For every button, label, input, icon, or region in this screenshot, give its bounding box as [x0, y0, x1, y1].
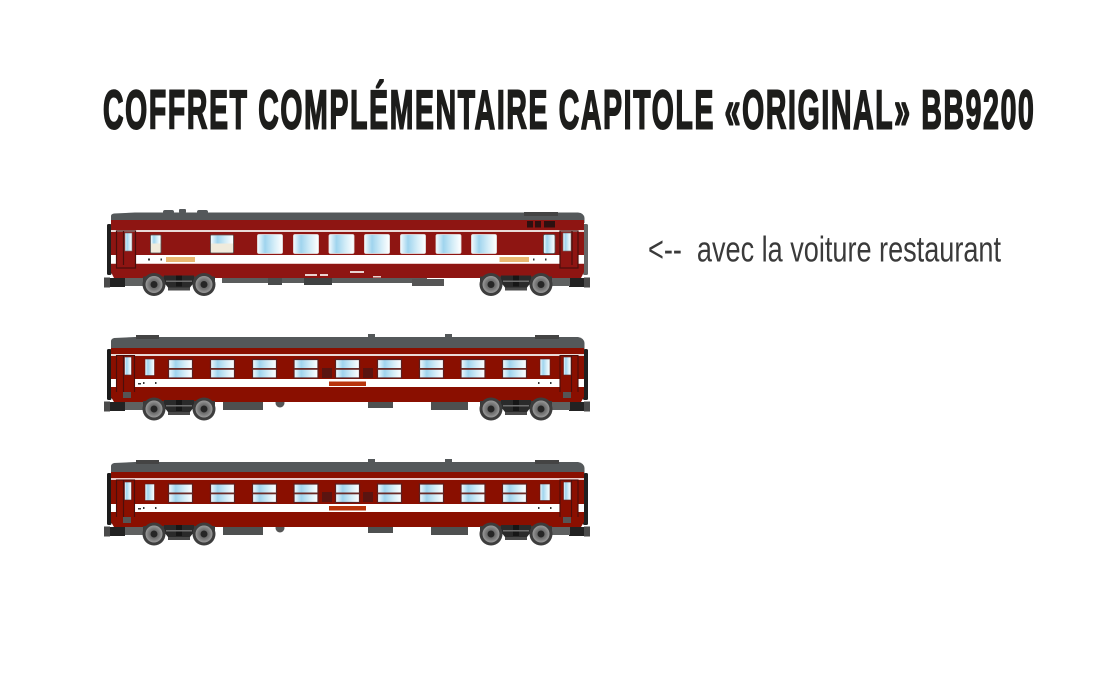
end gangways [107, 224, 112, 275]
door windows [124, 357, 571, 375]
roof [111, 212, 584, 223]
bogies [142, 398, 216, 420]
marks [138, 507, 552, 510]
dark panels [322, 492, 373, 502]
name plate [329, 382, 366, 386]
title: COFFRET COMPLÉMENTAIRE CAPITOLE «ORIGINAL» BB9200 [103, 81, 1034, 141]
red body [111, 220, 584, 278]
door panels [116, 480, 578, 517]
door panels [116, 232, 578, 268]
red body [111, 472, 584, 527]
doors [116, 480, 578, 517]
white waist band [111, 255, 584, 263]
doors [116, 231, 578, 268]
name plates [166, 257, 195, 262]
end gangways [107, 473, 112, 525]
door details [123, 517, 571, 523]
door windows [125, 233, 571, 251]
roof [111, 462, 584, 474]
carriage 2: passenger car [104, 334, 590, 420]
small windows [145, 359, 550, 376]
underframe [104, 277, 590, 288]
marks [148, 258, 546, 260]
white waist band [111, 504, 584, 512]
small windows [145, 484, 550, 500]
bogies [142, 522, 216, 546]
door windows [124, 482, 571, 500]
window mid bars [168, 492, 526, 494]
carriage 3: passenger car [104, 459, 590, 546]
name plate [329, 506, 366, 510]
bogies [142, 273, 216, 296]
white waist band [111, 379, 584, 387]
dark panels [322, 368, 373, 378]
white cant line [111, 354, 584, 356]
windows [168, 360, 526, 378]
red body [111, 348, 584, 402]
underframe [104, 524, 590, 536]
underframe [104, 398, 590, 412]
doors [116, 356, 578, 392]
roof [111, 337, 584, 350]
window mid bars [168, 368, 526, 370]
kitchen windows with cream blinds [150, 235, 234, 253]
door panels [116, 356, 578, 392]
marks [138, 382, 552, 384]
windows [168, 484, 526, 502]
carriage 1: restaurant car [104, 209, 590, 296]
roof vents [527, 221, 555, 228]
door details [123, 392, 571, 398]
windows [258, 234, 555, 254]
white cant line [111, 478, 584, 480]
white cant line [111, 230, 584, 232]
end gangways [107, 349, 112, 400]
